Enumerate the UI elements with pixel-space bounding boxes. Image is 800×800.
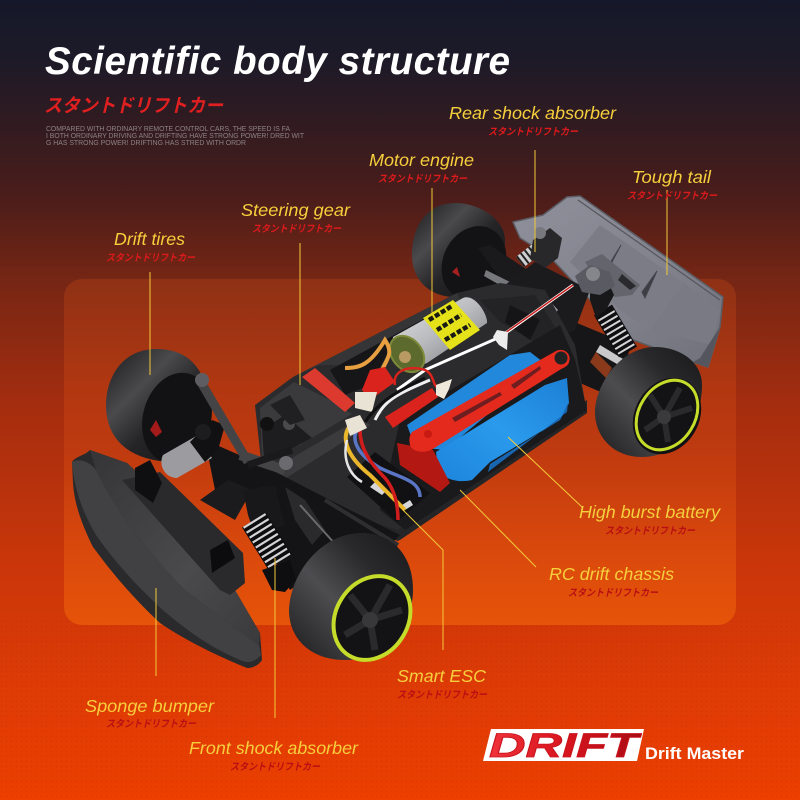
ESC board and wires [345, 424, 430, 522]
callout: sponge bumper [85, 588, 215, 730]
callout: front shock absorber: スタントドリフトカー [230, 761, 321, 773]
front shock [243, 485, 296, 592]
warning label [423, 300, 480, 350]
steering arm [195, 373, 293, 470]
callout: steering gear: Steering gear [241, 200, 351, 220]
tail wing [513, 196, 723, 367]
callout: motor engine: スタントドリフトカー [378, 173, 468, 185]
front chassis [200, 440, 400, 590]
callout: rear shock absorber: スタントドリフトカー [488, 126, 579, 138]
callout: drift tires: Drift tires [114, 229, 185, 249]
intro text block: COMPARED WITH ORDINARY REMOTE CONTROL CARS, THE SPEED IS FA [46, 126, 290, 133]
callout: steering gear: スタントドリフトカー [252, 223, 342, 235]
callout: high burst battery [508, 437, 721, 537]
callout: RC drift chassis [460, 490, 674, 599]
bumper plate [122, 472, 245, 595]
intro text block [46, 126, 305, 147]
intro text block: G HAS STRONG POWER! DRIFTING HAS STRED WITH ORDR [46, 140, 246, 147]
callout: motor engine: Motor engine [369, 150, 474, 170]
red steering cover [302, 368, 355, 412]
callout: front shock absorber [189, 558, 359, 773]
callout: high burst battery: スタントドリフトカー [605, 525, 696, 537]
chassis tub [255, 283, 587, 541]
red battery strap [397, 350, 570, 492]
callout: RC drift chassis: スタントドリフトカー [568, 587, 659, 599]
yellow rim ring [624, 369, 710, 461]
callout: tough tail [627, 167, 718, 275]
connectors and plugs [345, 367, 452, 436]
logo: Drift Master: Drift Master [645, 744, 744, 763]
callout: motor engine [369, 150, 474, 315]
callout: high burst battery: High burst battery [579, 502, 721, 522]
callout: tough tail: スタントドリフトカー [627, 190, 718, 202]
callout: rear shock absorber [449, 103, 617, 252]
callout: smart ESC: スタントドリフトカー [397, 689, 488, 701]
callout: front shock absorber: Front shock absorber [189, 738, 359, 758]
rear suspension and gearbox [478, 245, 630, 393]
callout: drift tires [106, 229, 196, 375]
near rear wheel [595, 347, 715, 467]
title: Scientific body structure [45, 40, 510, 83]
callout: smart ESC [397, 510, 488, 701]
callout: tough tail: Tough tail [632, 167, 712, 187]
callout: steering gear [241, 200, 351, 385]
callout: smart ESC: Smart ESC [397, 666, 486, 686]
rear left shock [520, 227, 562, 268]
car illustration [72, 196, 723, 675]
callout: sponge bumper: Sponge bumper [85, 696, 215, 716]
logo: Drift Master [483, 727, 744, 765]
motor [383, 297, 487, 379]
subtitle: スタントドリフトカー [44, 96, 224, 117]
high burst battery [407, 352, 569, 481]
far front wheel [106, 349, 222, 471]
servo wire [345, 285, 573, 390]
callout: rear shock absorber: Rear shock absorber [449, 103, 617, 123]
callout: RC drift chassis: RC drift chassis [549, 564, 674, 584]
dotted texture [0, 620, 800, 800]
logo: Drift Master: DRIFT [489, 727, 643, 765]
far rear wheel [412, 203, 518, 311]
left shock [161, 420, 225, 478]
panel: lighter backdrop [64, 279, 736, 625]
yellow rim ring [318, 562, 426, 674]
sponge bumper [72, 450, 262, 668]
callout: sponge bumper: スタントドリフトカー [106, 718, 197, 730]
rear right shock [575, 265, 628, 352]
callout: drift tires: スタントドリフトカー [106, 252, 196, 264]
intro text block: I BOTH ORDINARY DRIVING AND DRIFTING HAVE STRONG POWER! DRED WIT [46, 133, 305, 140]
near front wheel [289, 533, 427, 675]
